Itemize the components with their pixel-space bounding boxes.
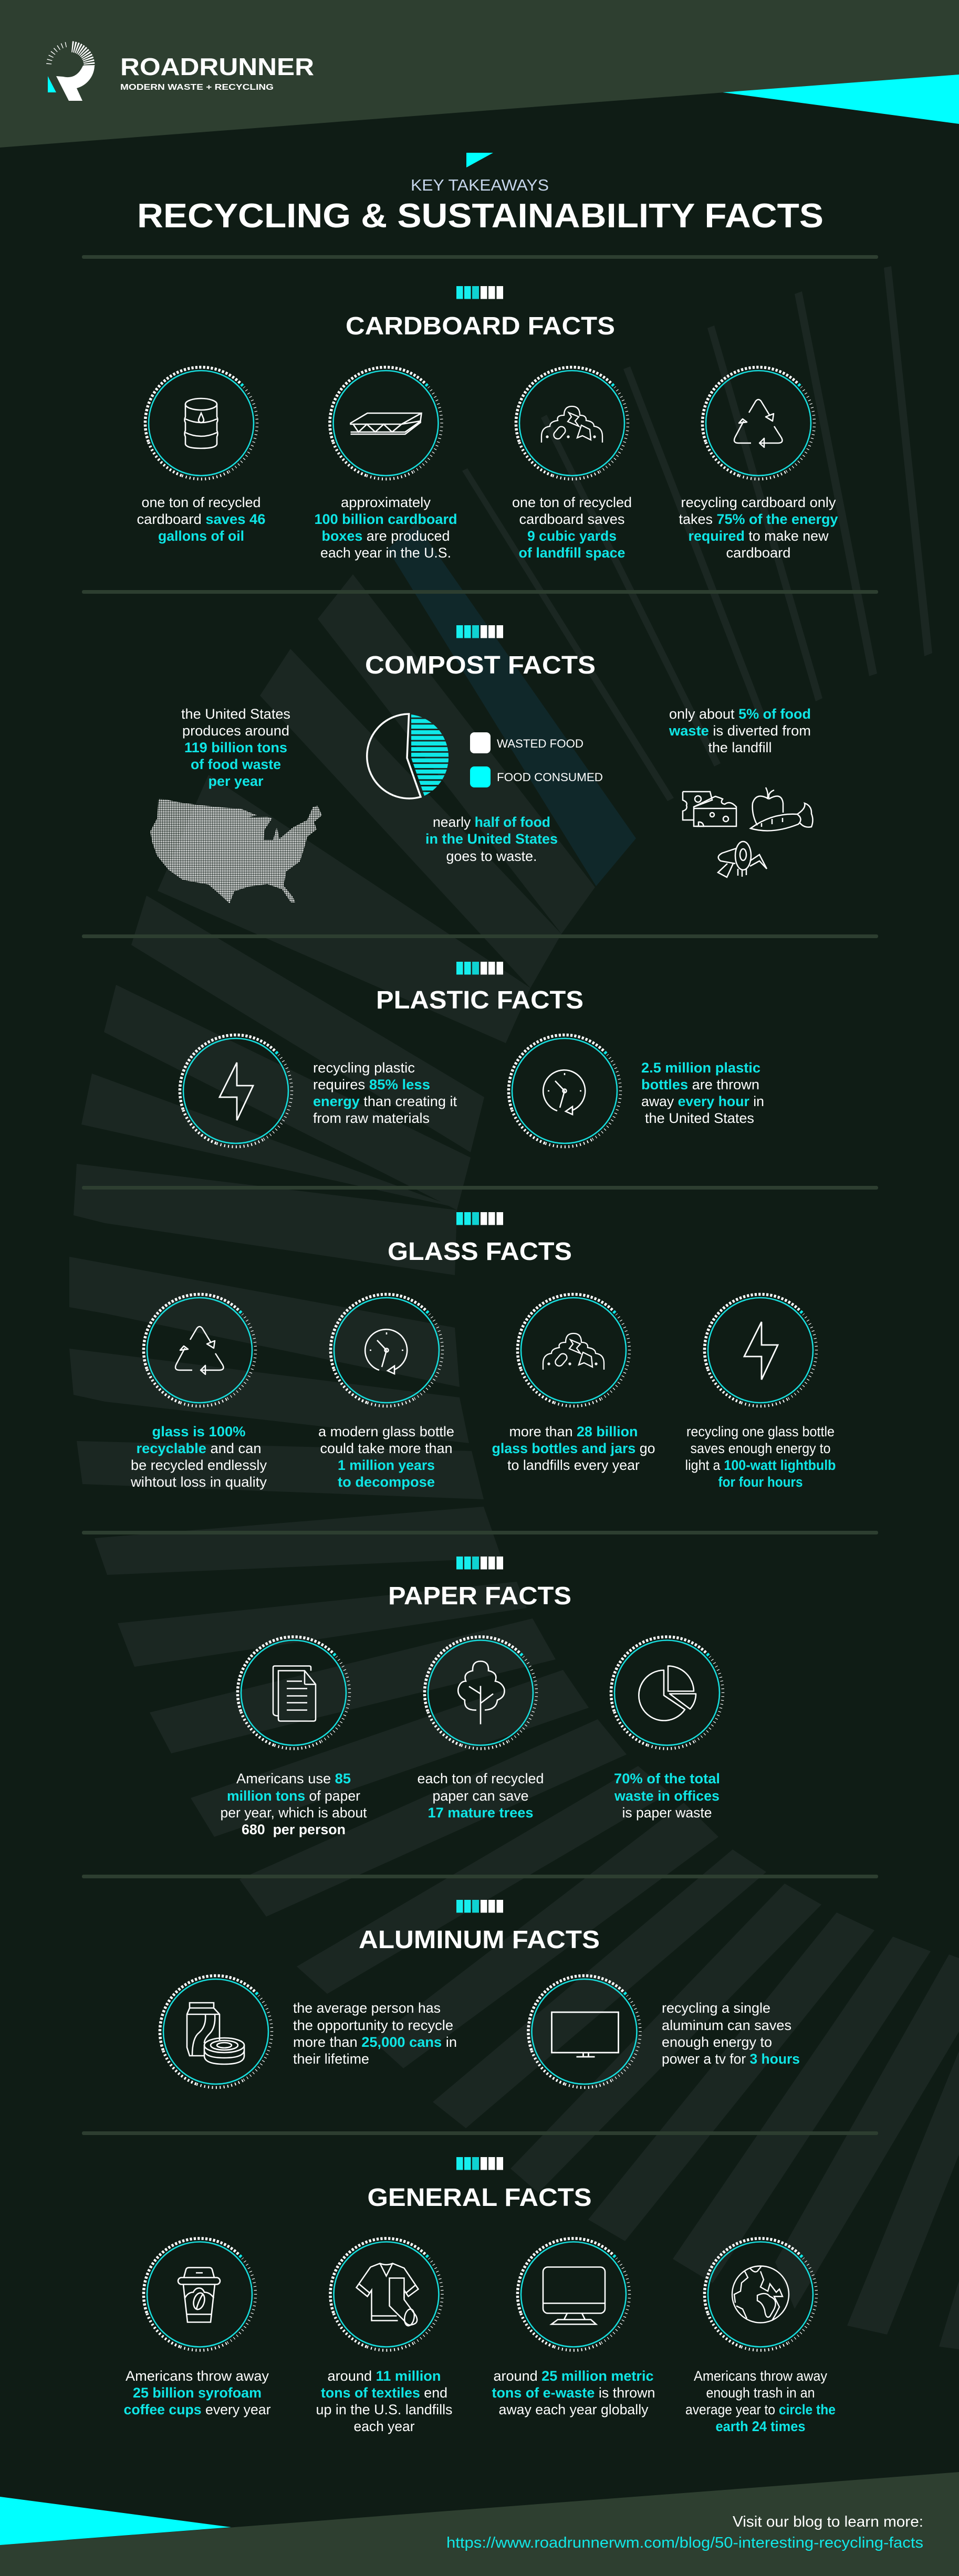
fact: textiles: around 11 million [328,2368,441,2384]
fact: trash earth: earth 24 times [715,2419,806,2434]
fact: e-waste [492,2238,655,2417]
fact: landfill space: cardboard saves [519,511,625,527]
fact: recycling energy: cardboard [726,545,791,561]
fact: glass energy [685,1294,836,1490]
fact: plastic bottles: away every hour in [641,1094,764,1109]
fact: landfill space: of landfill space [519,545,625,561]
fact: glass decompose: 1 million years [338,1457,435,1473]
fact: plastic energy: from raw materials [313,1110,430,1126]
fact: textiles: tons of textiles end [321,2385,447,2401]
heading: compost facts: COMPOST FACTS [365,651,596,679]
fact: textiles [316,2238,453,2434]
fact: plastic energy: energy than creating it [313,1094,457,1109]
title: KEY TAKEAWAYS [411,176,549,194]
fact: glass recyclable: glass is 100% [152,1424,246,1439]
fact: aluminum tv: recycling a single [662,2000,770,2016]
fact: cardboard boxes [314,367,457,561]
fact: glass to landfills [492,1294,655,1473]
footer call to action: https://www.roadrunnerwm.com/blog/50-interesting-recycling-facts [446,2535,923,2551]
fact: trash earth: Americans throw away [694,2368,827,2384]
fact: plastic bottles: the United States [645,1110,754,1126]
fact: food waste per year [181,706,290,789]
fact: paper use: per year, which is about [221,1805,367,1821]
fact: glass recyclable: be recycled endlessly [131,1457,267,1473]
chart: food pie [367,714,449,798]
fact: glass energy: for four hours [718,1474,802,1490]
fact: e-waste: away each year globally [499,2402,649,2417]
fact: landfill space: one ton of recycled [512,495,632,510]
fact: oil barrel: one ton of recycled [142,495,260,510]
fact: plastic bottles: bottles are thrown [641,1077,759,1092]
fact: oil barrel: gallons of oil [158,528,244,544]
fact: coffee cups: 25 billion syrofoam [133,2385,262,2401]
fact: glass recyclable [130,1294,267,1490]
fact: glass decompose: a modern glass bottle [318,1424,454,1439]
icon: cheese [683,792,736,826]
fact: paper trees [417,1637,544,1821]
fact: office waste: 70% of the total [614,1771,720,1786]
panel: glass facts [130,1212,836,1490]
fact: oil barrel [137,367,266,544]
fact: glass energy: saves enough energy to [690,1441,831,1456]
fact: recycling energy: recycling cardboard only [681,495,836,510]
fact: landfill space: 9 cubic yards [527,528,617,544]
footer call to action [446,2514,923,2551]
heading: cardboard facts: CARDBOARD FACTS [346,312,615,340]
fact: trash earth: enough trash in an [706,2385,815,2401]
fact: cardboard boxes: approximately [341,495,431,510]
fact: trash earth [685,2238,836,2434]
fact: cardboard boxes: boxes are produced [321,528,450,544]
fact: half of food: nearly half of food [433,814,550,830]
footer band [0,2472,959,2576]
fact: food diverted: waste is diverted from [669,723,811,739]
fact: food waste per year: 119 billion tons [184,740,287,755]
fact: aluminum tv: aluminum can saves [662,2017,791,2033]
map: united states [150,799,322,903]
legend: FOOD CONSUMED [497,771,603,784]
icon: fish and meat [718,842,767,877]
fact: aluminum cans: more than 25,000 cans in [293,2034,457,2050]
fact: trash earth: average year to circle the [685,2402,836,2417]
fact: landfill space [512,367,632,561]
fact: e-waste: around 25 million metric [494,2368,653,2384]
fact: coffee cups: Americans throw away [126,2368,269,2384]
fact: aluminum cans: the average person has [293,2000,441,2016]
fact: food diverted: the landfill [708,740,772,755]
fact: recycling energy [679,367,838,561]
heading: paper facts: PAPER FACTS [388,1582,571,1610]
fact: food waste per year: the United States [181,706,290,722]
fact: recycling energy: required to make new [688,528,829,544]
fact: plastic energy: recycling plastic [313,1060,415,1076]
fact: half of food: in the United States [425,831,558,847]
fact: glass recyclable: wihtout loss in quality [130,1474,267,1490]
heading: general facts: GENERAL FACTS [368,2184,591,2212]
heading: glass facts: GLASS FACTS [388,1238,572,1266]
fact: half of food [425,814,558,864]
fact: glass decompose: to decompose [338,1474,435,1490]
fact: plastic energy: requires 85% less [313,1077,430,1092]
heading: aluminum facts: ALUMINUM FACTS [359,1926,600,1954]
fact: plastic energy [180,1035,457,1147]
fact: coffee cups: coffee cups every year [124,2402,271,2417]
fact: paper trees: paper can save [433,1788,528,1804]
header band [0,0,959,148]
fact: aluminum cans: the opportunity to recycle [293,2017,453,2033]
heading: plastic facts: PLASTIC FACTS [376,986,583,1014]
fact: food waste per year: per year [208,773,264,789]
logo: roadrunner [48,45,314,101]
fact: aluminum cans [160,1975,457,2087]
panel: aluminum facts [160,1900,800,2087]
legend [470,732,603,787]
logo: roadrunner: ROADRUNNER [120,53,314,80]
fact: coffee cups [124,2238,271,2417]
fact: plastic bottles: 2.5 million plastic [641,1060,760,1076]
fact: aluminum cans: their lifetime [293,2051,369,2067]
fact: office waste: waste in offices [614,1788,720,1804]
fact: office waste [611,1637,723,1821]
fact: textiles: each year [354,2419,415,2434]
fact: textiles: up in the U.S. landfills [316,2402,453,2417]
title: RECYCLING & SUSTAINABILITY FACTS [137,196,824,235]
fact: paper use: Americans use 85 [236,1771,351,1786]
panel: plastic facts [180,962,764,1147]
fact: glass energy: recycling one glass bottle [686,1424,835,1439]
fact: plastic bottles [508,1035,764,1147]
fact: e-waste: tons of e-waste is thrown [492,2385,655,2401]
fact: glass to landfills: to landfills every year [507,1457,640,1473]
fact: office waste: is paper waste [622,1805,712,1821]
fact: food waste per year: produces around [182,723,289,739]
fact: food diverted: only about 5% of food [669,706,811,722]
icon: apple and carrot [750,787,813,830]
fact: glass to landfills: glass bottles and jars go [492,1441,655,1456]
fact: oil barrel: cardboard saves 46 [137,511,266,527]
panel: general facts [124,2157,836,2434]
logo: roadrunner: MODERN WASTE + RECYCLING [120,83,274,92]
panel: cardboard facts [137,286,838,561]
fact: glass recyclable: recyclable and can [137,1441,261,1456]
fact: half of food: goes to waste. [446,848,537,864]
fact: glass energy: light a 100-watt lightbulb [685,1457,836,1473]
title [137,153,824,235]
fact: paper trees: 17 mature trees [428,1805,534,1821]
fact: food waste per year: of food waste [191,756,281,772]
fact: glass decompose: could take more than [320,1441,453,1456]
panel: paper facts [221,1557,723,1837]
fact: paper trees: each ton of recycled [417,1771,544,1786]
footer call to action: Visit our blog to learn more: [733,2514,923,2530]
fact: food diverted [669,706,811,755]
fact: glass decompose [318,1294,454,1490]
fact: aluminum tv: power a tv for 3 hours [662,2051,800,2067]
fact: paper use [221,1637,367,1837]
fact: paper use: million tons of paper [227,1788,360,1804]
fact: cardboard boxes: 100 billion cardboard [314,511,457,527]
fact: glass to landfills: more than 28 billion [509,1424,638,1439]
fact: paper use: 680 per person [242,1822,346,1837]
fact: cardboard boxes: each year in the U.S. [320,545,451,561]
fact: recycling energy: takes 75% of the energy [679,511,838,527]
fact: aluminum tv: enough energy to [662,2034,772,2050]
panel: compost facts [150,625,813,903]
background: radial strips [69,266,959,2349]
legend: WASTED FOOD [497,737,583,750]
fact: aluminum tv [528,1975,800,2087]
